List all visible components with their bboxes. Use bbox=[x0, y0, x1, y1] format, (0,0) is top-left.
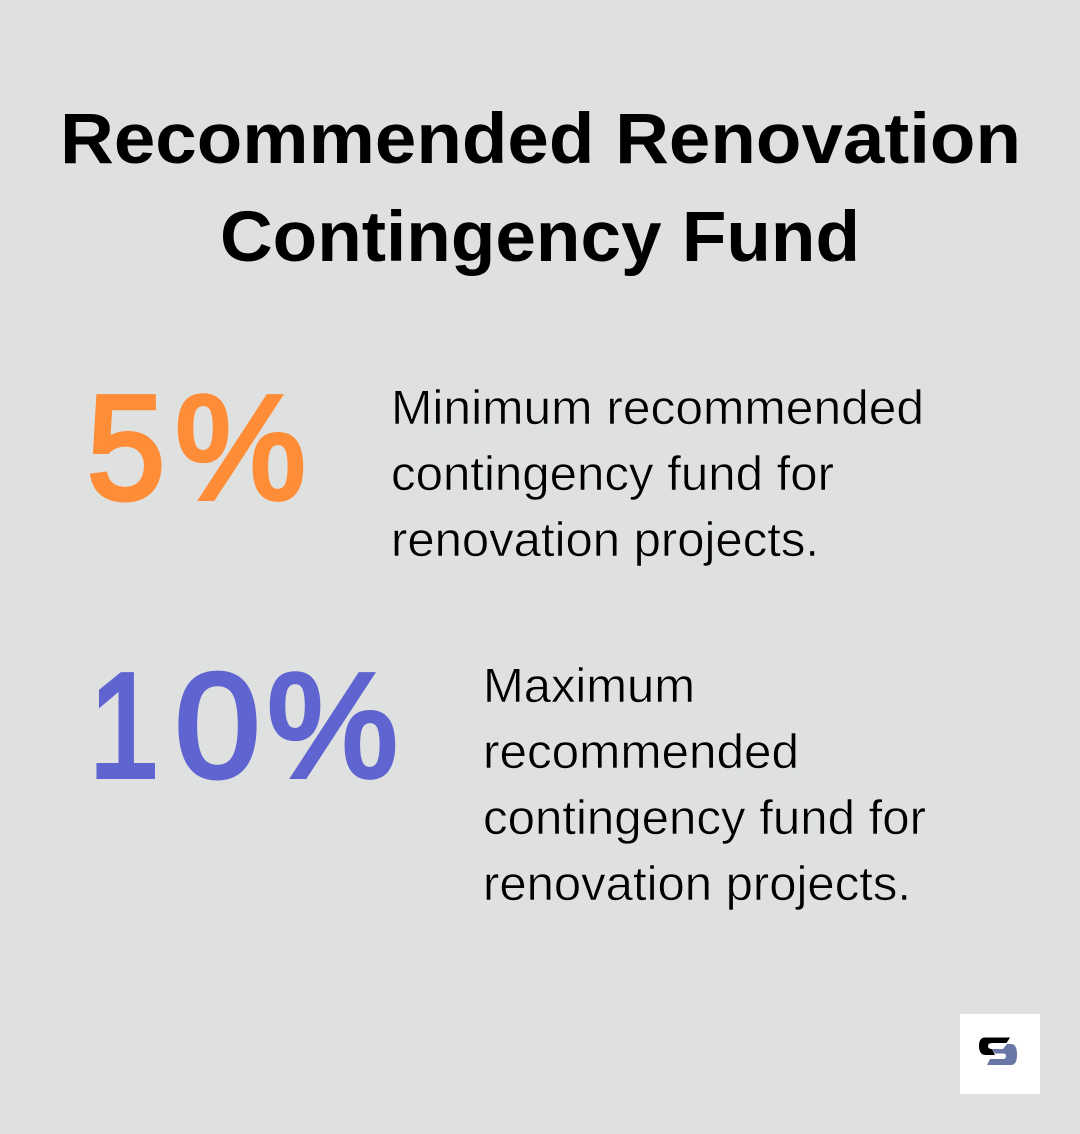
stat number: 5% bbox=[87, 366, 306, 530]
stat number: 5%: 5 bbox=[87, 366, 165, 530]
stat description: minimum: Minimum recommended bbox=[391, 382, 924, 435]
logo mark: black part bbox=[979, 1038, 1010, 1055]
logo badge bbox=[960, 1014, 1040, 1094]
stat number: 10%: % bbox=[267, 644, 398, 808]
stat description: maximum: contingency fund for bbox=[483, 792, 926, 845]
stat description: minimum: contingency fund for bbox=[391, 448, 834, 501]
stat: 10% maximum bbox=[89, 644, 926, 911]
title bbox=[60, 100, 1021, 277]
stat description: maximum: Maximum bbox=[483, 660, 695, 713]
stat description: maximum: renovation projects. bbox=[483, 858, 911, 911]
stat: 5% minimum bbox=[87, 366, 924, 567]
stat number: 10% bbox=[89, 644, 398, 808]
stat number: 5%: % bbox=[175, 366, 306, 530]
stat description: minimum: renovation projects. bbox=[391, 514, 819, 567]
stat number: 10%: 0 bbox=[175, 644, 260, 808]
stat description: maximum bbox=[483, 660, 926, 911]
logo mark: blue part bbox=[987, 1044, 1017, 1065]
stat number: 10%: 1 bbox=[89, 644, 159, 808]
title: Recommended Renovation bbox=[60, 100, 1021, 179]
stat description: maximum: recommended bbox=[483, 726, 799, 779]
stat description: minimum bbox=[391, 382, 924, 567]
title: Contingency Fund bbox=[220, 198, 860, 277]
